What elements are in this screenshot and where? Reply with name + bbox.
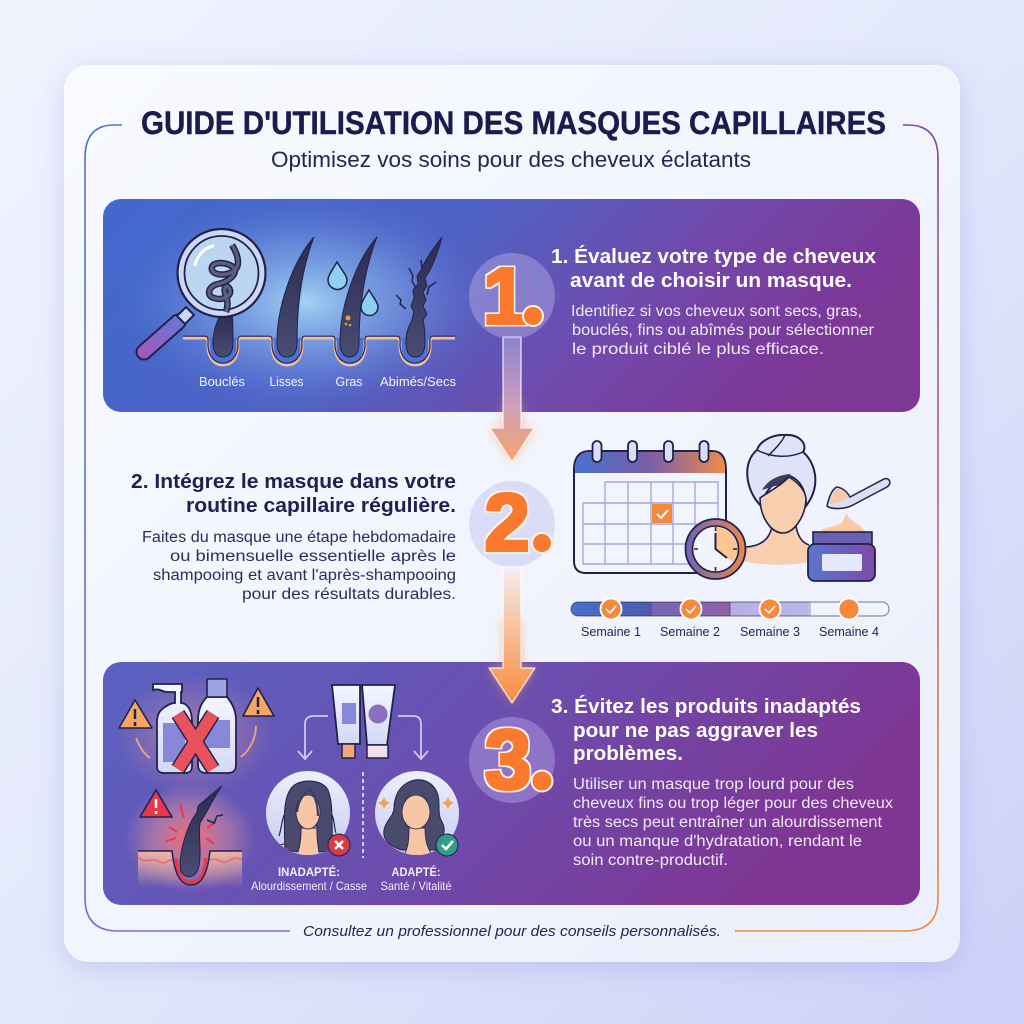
arrow right (398, 716, 428, 759)
badge: number 1: 1 (483, 252, 527, 340)
frame: right bracket (735, 125, 938, 931)
portrait: suitable (375, 771, 459, 858)
title: GUIDE D'UTILISATION DES MASQUES CAPILLAIRES (141, 105, 886, 141)
labels: hair types (199, 375, 456, 389)
footer note: Consultez un professionnel pour des conseils personnalisés. (303, 923, 721, 940)
label: unsuitable (251, 864, 367, 893)
step 3 text: Utiliser un masque trop lourd pour des (573, 776, 854, 793)
face (760, 477, 806, 533)
illustration: damaged hair follicle (124, 783, 256, 893)
week dividers (651, 602, 810, 616)
skin wave (138, 857, 242, 863)
towel (747, 435, 815, 506)
labels: hair types: Abimés/Secs (380, 375, 456, 389)
warning red (140, 790, 172, 817)
marker week 1 (600, 598, 622, 620)
scalp dark line (183, 336, 455, 363)
step 2 text: shampooing et avant l'après-shampooing (153, 567, 456, 584)
step 3 text: problèmes. (573, 742, 683, 765)
step 1 text: 1. Évaluez votre type de cheveux (551, 245, 877, 268)
scalp bowls (183, 338, 455, 365)
warning left (119, 700, 152, 728)
warning right (243, 688, 274, 716)
calendar grid (583, 482, 718, 564)
step 3 text: pour ne pas aggraver les (573, 719, 818, 742)
sparkles (378, 797, 454, 809)
labels: weeks: Semaine 4 (819, 625, 879, 639)
illustration: crossed-out products (115, 675, 275, 795)
illustration: calendar (574, 441, 726, 573)
towel fold (757, 435, 803, 456)
step 3 text (551, 695, 893, 869)
red sparks (166, 804, 216, 844)
step 2 text: pour des résultats durables. (242, 586, 456, 603)
hair back (284, 781, 333, 852)
frame: left bracket (85, 125, 290, 931)
main card (64, 65, 960, 962)
pump bottle (153, 684, 192, 773)
hair fringe (762, 474, 794, 490)
hair: oily (340, 237, 377, 357)
skin (138, 851, 242, 888)
labels: weeks: Semaine 2 (660, 625, 720, 639)
face (402, 795, 430, 829)
loose ends (279, 815, 336, 836)
label: unsuitable: Alourdissement / Casse (251, 879, 367, 893)
portrait: unsuitable (266, 771, 350, 860)
second bottle (198, 697, 236, 773)
hair: curly root (213, 312, 233, 357)
labels: hair types: Bouclés (199, 375, 245, 389)
neck outline (746, 526, 809, 547)
illustration: woman with towel (742, 435, 815, 565)
panel: step 3 (103, 662, 920, 905)
red cross (178, 714, 213, 769)
labels: weeks: Semaine 1 (581, 625, 641, 639)
calendar header (575, 452, 725, 473)
magnifier neck (177, 307, 194, 324)
arrow: step 2 to 3 (489, 567, 535, 703)
tube left (332, 685, 360, 744)
step 3 text: ou un manque d'hydratation, rendant le (573, 833, 862, 850)
badge: number 3 (469, 712, 555, 806)
step 3 text: 3. Évitez les produits inadaptés (551, 695, 861, 718)
badge: number 2 (469, 478, 555, 568)
label: suitable: ADAPTÉ: (392, 864, 440, 879)
skin line (138, 851, 242, 885)
hair shaft (180, 786, 222, 877)
arrow: step 1 to 2 (490, 337, 534, 462)
step 1 text: bouclés, fins ou abîmés pour sélectionner (572, 322, 874, 339)
magnifier handle (144, 322, 178, 352)
lens highlight (195, 246, 213, 265)
error badge (328, 834, 350, 856)
follicle ring (176, 858, 206, 882)
illustration: cream jar (808, 514, 875, 581)
pump label (163, 723, 185, 762)
step 2 text: routine capillaire régulière. (186, 494, 456, 517)
label: unsuitable: INADAPTÉ: (278, 864, 340, 879)
magnifier glass (184, 236, 258, 310)
hair: straight (277, 237, 314, 357)
labels: weeks (581, 625, 879, 639)
shoulders (742, 526, 815, 565)
badge: number 3: 3 (485, 712, 531, 806)
illustration: tubes with arrows (298, 685, 428, 759)
step 3 text: très secs peut entraîner un alourdissement (573, 814, 883, 831)
badge: number 1 (469, 252, 555, 340)
arrow left (298, 716, 328, 759)
panel: step 1 (103, 194, 920, 412)
step 2 text: 2. Intégrez le masque dans votre (131, 470, 456, 493)
step 1 text: Identifiez si vos cheveux sont secs, gras, (571, 303, 862, 320)
curved accents (136, 726, 256, 758)
illustration: hair types (144, 229, 455, 365)
label: suitable: Santé / Vitalité (380, 879, 452, 893)
hair: damaged (406, 237, 442, 357)
label: suitable (380, 864, 452, 893)
magnifier lens (178, 229, 266, 317)
labels: hair types: Lisses (270, 375, 304, 389)
step 2 text: ou bimensuelle essentielle après le (170, 548, 456, 565)
face (296, 795, 320, 829)
split ends (396, 260, 436, 309)
step 1 text (551, 245, 877, 358)
marker week 4 (838, 598, 860, 620)
calendar rings (592, 441, 708, 462)
step 1 text: le produit ciblé le plus efficace. (572, 341, 824, 358)
neck and chest (404, 828, 431, 855)
dashed separator (362, 772, 364, 858)
front strands (297, 789, 318, 816)
shoulders (280, 828, 328, 855)
bottle label (200, 720, 230, 748)
success badge (436, 834, 458, 856)
tube right (362, 685, 395, 745)
curly hair in lens (209, 245, 238, 312)
labels: weeks: Semaine 3 (740, 625, 800, 639)
checked day (652, 504, 672, 523)
drop right (361, 290, 378, 316)
illustration: clock (686, 519, 746, 579)
calendar body (574, 451, 726, 573)
illustration: spoon (827, 479, 890, 509)
labels: hair types: Gras (336, 375, 362, 389)
step 1 text: avant de choisir un masque. (570, 269, 852, 292)
step 2 text (131, 470, 456, 603)
oil specks (345, 316, 351, 326)
subtitle: Optimisez vos soins pour des cheveux éclatants (271, 147, 751, 172)
progress timeline (571, 598, 889, 620)
drop left (328, 262, 347, 290)
badge: number 2: 2 (484, 478, 530, 568)
step 2 text: Faites du masque une étape hebdomadaire (142, 529, 456, 546)
marker week 2 (680, 598, 702, 620)
hair (384, 780, 444, 850)
step 3 text: soin contre-productif. (573, 852, 728, 869)
split (207, 815, 223, 823)
marker week 3 (760, 598, 780, 620)
step 3 text: cheveux fins ou trop léger pour des cheveux (573, 795, 893, 812)
bottle cap (207, 679, 227, 697)
